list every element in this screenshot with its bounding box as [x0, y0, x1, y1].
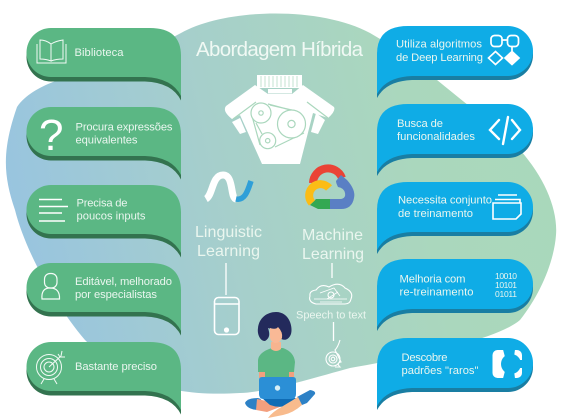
text: Precisa de: [76, 198, 128, 210]
icon: folders: [493, 195, 521, 219]
icon: text lines: [39, 200, 68, 221]
panel: Busca de funcionalidades: [377, 104, 533, 176]
panel: padrões raros: [377, 338, 533, 410]
icon: question mark: ?: [39, 111, 63, 160]
heading: Linguistic Learning: Linguistic: [195, 224, 262, 241]
right foot: [297, 390, 315, 405]
face: [270, 327, 282, 343]
hair: [258, 312, 292, 341]
front leg: [268, 397, 302, 418]
panel: Deep Learning: [377, 26, 533, 98]
icon: binary: 10101: [495, 280, 517, 290]
panel: Precisa de poucos inputs: poucos inputs: [76, 210, 146, 222]
laptop: [259, 377, 296, 399]
icon: person: [42, 274, 60, 299]
panel: Procura expressões equivalentes: equivalentes: [76, 134, 138, 146]
shorts: [262, 398, 296, 407]
icon: book: [37, 40, 66, 63]
heading: Linguistic Learning: [195, 224, 262, 260]
lower leg: [256, 399, 285, 412]
panel: conjunto de treinamento: de treinamento: [398, 208, 473, 220]
icon: rare patterns: [492, 350, 523, 378]
panel: padrões raros: padrões "raros": [402, 365, 479, 377]
heading: Machine Learning: [302, 227, 364, 263]
connector lines: [226, 263, 334, 341]
icon: binary: 01011: [495, 289, 517, 299]
panel: Deep Learning: de Deep Learning: [396, 52, 483, 64]
text: Necessita conjunto: [398, 194, 492, 206]
arms: [259, 372, 294, 378]
text: Melhoria com: [400, 274, 466, 286]
icon: target: [36, 351, 65, 384]
panel: Precisa de poucos inputs: [26, 185, 181, 258]
heading: Linguistic Learning: Learning: [197, 243, 260, 260]
text: Utiliza algoritmos: [396, 38, 482, 50]
illustration: person with laptop: [245, 312, 315, 418]
label: Speech to text: Speech to text: [296, 310, 366, 322]
text: Busca de: [397, 118, 443, 130]
icon: Google Cloud: [309, 168, 354, 209]
panel: Bastante preciso: [26, 342, 181, 414]
icon: speaking head: [326, 340, 341, 367]
torso: [258, 348, 295, 377]
panel: Busca de funcionalidades: funcionalidades: [397, 131, 475, 143]
panel: conjunto de treinamento: [377, 182, 533, 254]
panel: Editável: [26, 263, 181, 336]
heading: Machine Learning: Machine: [302, 227, 363, 244]
panel: re-treinamento: [377, 259, 533, 331]
icon: binary: 10010: [495, 271, 517, 281]
icon: flowchart: [488, 36, 519, 64]
heading: Machine Learning: Learning: [302, 246, 364, 263]
text: Procura expressões: [76, 122, 173, 134]
left foot: [245, 398, 261, 410]
text: Bastante preciso: [75, 361, 157, 373]
title: Abordagem Híbrida: [196, 38, 364, 61]
panel: Procura expressões equivalentes: [26, 107, 181, 180]
icon: linguistic wave: [206, 175, 251, 199]
icon: phone: [214, 298, 239, 334]
icon: code: [490, 117, 520, 144]
neck: [271, 342, 281, 351]
text: Descobre: [402, 352, 448, 364]
text: Biblioteca: [74, 47, 124, 59]
panel: Editável: por especialistas: [75, 289, 157, 301]
text: Editável, melhorado: [75, 276, 172, 288]
panel: re-treinamento: re-treinamento: [400, 286, 474, 298]
icon: binary: [495, 271, 517, 299]
icon: speech cloud: [310, 284, 352, 304]
icon: engine: [225, 75, 334, 164]
panel: Biblioteca: [26, 28, 181, 100]
